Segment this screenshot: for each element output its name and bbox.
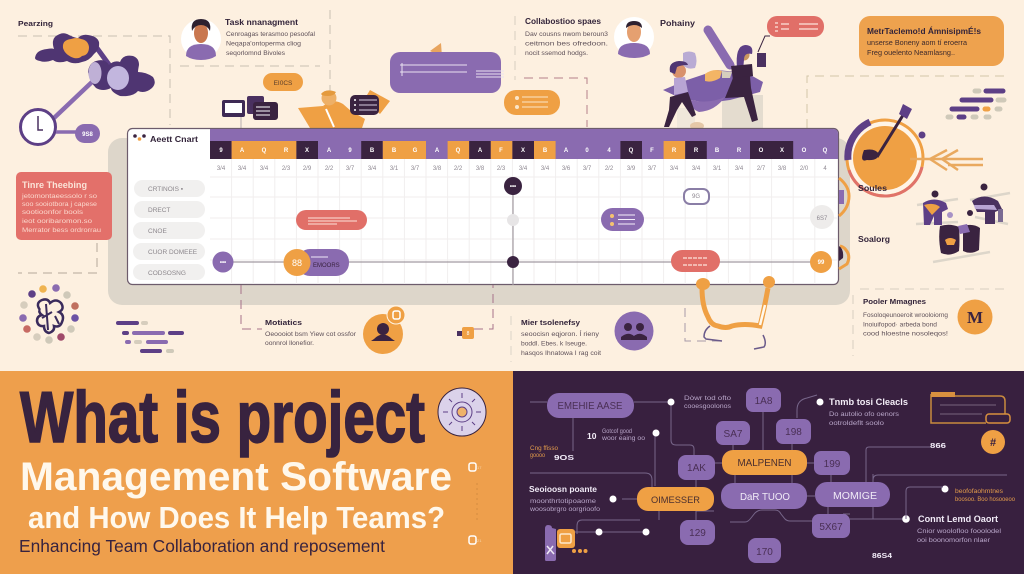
task list pills: CUOR DOMEEE <box>148 249 198 256</box>
text block: left orange note: 9OS <box>554 455 574 462</box>
icon: group in purple circle <box>614 312 654 350</box>
text block: content and chart: ooi boonomorfon nlaer <box>917 537 990 544</box>
task bar: outlined <box>684 189 709 204</box>
timeline header cells: Q <box>629 148 634 154</box>
icon: small connector plug <box>457 285 493 339</box>
timeline header cells: B <box>392 148 397 154</box>
timeline date labels: 3/7 <box>583 166 592 172</box>
timeline header cells: F <box>650 148 654 154</box>
task list pills: CRTINOIS ▪ <box>148 186 183 193</box>
subtitle: Enhancing Team Collaboration and reposement <box>19 536 385 556</box>
node: 1A8 <box>746 388 781 412</box>
timeline header cells: 4 <box>607 148 611 154</box>
callout: orange list pill <box>504 78 587 127</box>
milestone: dark top marker <box>504 177 522 195</box>
node: 170: 170 <box>756 547 773 558</box>
timeline date labels: 3/4 <box>670 166 679 172</box>
illustration: two people on a purple device <box>663 30 766 130</box>
grid lines <box>210 159 838 284</box>
timeline date labels: 3/8 <box>433 166 442 172</box>
gantt title: Aeett Cnart <box>150 134 198 144</box>
text block: trend tool details: Do autolio ofo oenors <box>829 411 899 418</box>
timeline header cells: R <box>284 148 289 154</box>
timeline header cells: R <box>672 148 677 154</box>
node: SA7: SA7 <box>724 429 743 440</box>
callout: time tracking: Tinre Theebing <box>22 180 87 190</box>
node: 198 <box>776 419 811 444</box>
callout: purple speech box <box>390 43 504 93</box>
text block: right orange note: boosoo. Boo hosooeoo <box>955 496 1016 503</box>
panel: gantt chart <box>128 128 838 285</box>
callout: time tracking: Merrator bess ordrorrau <box>22 227 102 234</box>
connector dots <box>596 398 948 536</box>
callout: orange key message box: unserse Boneny aom tí eroerra <box>867 40 967 47</box>
text block: number 10 note: Gotcof good <box>602 428 632 435</box>
node: 199 <box>814 451 850 475</box>
timeline header cells: B <box>715 148 720 154</box>
timeline date labels: 3/4 <box>519 166 528 172</box>
text block: collaboration spaces: Dav cousns nwom beroun3 <box>525 31 608 38</box>
icon: small status markers <box>469 463 482 544</box>
panel: personas illustration: Pearzing <box>18 19 53 28</box>
timeline date labels: 3/4 <box>368 166 377 172</box>
timeline header cells: A <box>564 148 569 154</box>
timeline connector lines <box>223 186 822 285</box>
timeline header cells: R <box>694 148 699 154</box>
timeline date labels: 3/4 <box>735 166 744 172</box>
label: 866 top: 866 <box>930 443 946 450</box>
node: 129: 129 <box>689 528 706 539</box>
title: What is project <box>20 378 425 458</box>
text block: task management <box>180 10 330 96</box>
timeline header cells: Q <box>823 148 828 154</box>
text block: session points: moonthrtotipoaome <box>530 498 597 505</box>
timeline header cells <box>210 141 828 159</box>
text block: collaboration spaces: Collabostioo spaes <box>525 16 601 26</box>
panel: orange title band <box>0 371 513 574</box>
timeline header cells: O <box>759 148 764 154</box>
node: SA7 <box>716 421 750 445</box>
node: 199: 199 <box>824 459 841 470</box>
text block: motivation: Motiatics <box>265 318 302 327</box>
text block: task management: Neqapa'ontoperma cliog <box>226 40 301 48</box>
node: MALPENEN: MALPENEN <box>738 458 792 469</box>
node: 1AK <box>678 455 715 480</box>
timeline date labels: 2/2 <box>454 166 463 172</box>
timeline date labels: 2/2 <box>325 166 334 172</box>
timeline header cells: A <box>478 148 483 154</box>
timeline date labels: 2/3 <box>282 166 291 172</box>
text block: number 10 note: woor eaing oo <box>601 435 646 442</box>
timeline date labels: 3/6 <box>562 166 571 172</box>
timeline date labels: 2/2 <box>605 166 614 172</box>
text block: session points <box>529 484 601 513</box>
timeline date labels: 3/4 <box>692 166 701 172</box>
timeline date labels: 3/7 <box>346 166 355 172</box>
callout: orange key message box <box>859 16 1004 66</box>
icon: window outline <box>931 392 1010 423</box>
text block: motivation <box>241 285 357 347</box>
text block: content and chart <box>917 514 1001 544</box>
icon: person in orange circle <box>363 306 405 354</box>
text block: trend tool details: ootroldeflt soolo <box>829 420 885 427</box>
label: sources: Soules <box>858 184 888 193</box>
node: 5X67: 5X67 <box>819 522 843 533</box>
text block: resource manager: M <box>967 308 983 327</box>
text block: left orange note: a: <box>568 456 572 462</box>
timeline date labels <box>217 166 827 172</box>
text block: right orange note: beofofaohmtnes <box>955 488 1003 495</box>
text block: session points: woosobrgro oorgrioofo <box>529 506 601 513</box>
text block: resource manager: Fosoloqeunoeroit wrooloiorng <box>863 312 948 319</box>
text block: resource manager: Inoiuifopod· arbeda bond <box>863 322 937 328</box>
task bar: outlined: 9G <box>692 194 700 200</box>
node: 198: 198 <box>785 427 802 438</box>
task list pills <box>133 180 205 280</box>
milestone: grey value marker <box>810 205 834 229</box>
task bar: purple list <box>601 208 644 231</box>
node: EMEHIE AASE: EMEHIE AASE <box>558 401 623 412</box>
node: MOMIGE <box>815 482 890 507</box>
timeline header cells: G <box>413 148 418 154</box>
timeline date labels: 2/9 <box>303 166 312 172</box>
milestone: orange end marker: 99 <box>818 260 825 266</box>
badge: orange label pill: EI0CS <box>274 80 293 87</box>
panel: dark flow band <box>513 371 1024 574</box>
node: EMEHIE AASE <box>547 393 634 418</box>
text block: resource manager <box>853 289 1005 356</box>
timeline header cells: R <box>737 148 742 154</box>
task bar: purple and orange <box>284 249 349 276</box>
timeline date labels: 3/4 <box>260 166 269 172</box>
text block: resource manager: cood hloestne nosoleqos! <box>863 330 948 338</box>
chart: flow connector lines <box>530 395 1007 534</box>
timeline date labels: 3/4 <box>217 166 226 172</box>
timeline header cells: Q <box>456 148 461 154</box>
timeline date labels: 3/1 <box>390 166 399 172</box>
text block: left orange note <box>530 445 574 462</box>
task list pills: DRECT <box>148 207 170 214</box>
callout: time tracking: soo sooiotbora j capese <box>22 201 98 208</box>
text block: top note: cooesgoolonos <box>684 403 731 410</box>
task bar: purple and orange: EMOORS <box>313 263 340 269</box>
icon: clock: 9S8 <box>82 132 93 138</box>
node: 5X67 <box>812 514 850 538</box>
timeline header cells: X <box>780 148 784 154</box>
text block: content and chart: Connt Lemd Oaort <box>918 514 998 524</box>
legend: mini status bars <box>948 91 1004 117</box>
illustration: person with laptop <box>298 90 390 128</box>
milestone: grey value marker: 6S7 <box>817 216 828 222</box>
timeline header cells: 0 <box>585 148 589 154</box>
icon: team brain with dot ring <box>19 284 79 344</box>
person: seated left <box>664 61 696 127</box>
label: scaling: Soalorg <box>858 235 890 244</box>
panel: personas illustration <box>18 19 170 144</box>
illustration: seated team <box>916 184 1010 262</box>
text block: task management: seqorlomnd Bivoles <box>226 50 285 57</box>
node: MALPENEN <box>722 450 807 475</box>
text block: session points: Seoioosn poante <box>529 484 597 494</box>
text block: number 10 note <box>587 428 646 442</box>
node: 129 <box>680 520 715 545</box>
text block: collaboration spaces <box>515 16 696 80</box>
node: DaR TUOO: DaR TUOO <box>740 491 790 503</box>
text block: collaboration spaces: nocit ssemod hodgs. <box>525 50 588 57</box>
panel: gantt backdrop <box>108 138 850 305</box>
timeline header cells: A <box>327 148 332 154</box>
icon: target disc <box>438 388 486 436</box>
icon: orange hash badge <box>981 430 1005 454</box>
legend: purple bars bottom left <box>118 323 182 351</box>
text block: right orange note <box>906 487 1016 519</box>
timeline header cells: A <box>240 148 245 154</box>
text block: left orange note: goooo <box>530 452 545 459</box>
task list pills: CODSOSNG <box>148 270 186 277</box>
chart: gauge dial with arrows <box>807 76 1005 196</box>
timeline date labels: 3/7 <box>411 166 420 172</box>
title line two: Management Software <box>20 455 452 499</box>
text block: top note: Dòwr tod ofto <box>684 395 732 402</box>
illustration: ring handles on gantt edge <box>839 178 849 269</box>
icon: small status markers: 17 <box>477 465 482 470</box>
node: OIMESSER <box>637 487 714 511</box>
label: 868 bottom: 86S4 <box>872 553 892 560</box>
node: OIMESSER: OIMESSER <box>651 495 700 506</box>
icon: orange tube under chart <box>685 276 775 349</box>
milestone: orange end marker <box>810 251 832 273</box>
text block: task management: Cenroagas terasmoo pesoofal <box>226 31 315 38</box>
callout: time tracking: jetomontaeessolo r so <box>21 193 98 200</box>
timeline header cells: F <box>499 148 503 154</box>
timeline header cells: B <box>370 148 375 154</box>
timeline header cells: X <box>305 148 309 154</box>
text block: meet tools: boddl. Ebes. k Iseuge. <box>521 340 587 348</box>
text block: meet tools: Mier tsolenefsy <box>521 318 581 327</box>
text block: motivation: Oeoooiot bsm Yiew cot ossfor <box>265 331 357 338</box>
milestone: dark top marker: ••• <box>510 184 516 190</box>
callout: time tracking <box>16 172 112 273</box>
milestone: grey marker <box>507 214 519 226</box>
person: standing right <box>725 45 766 122</box>
milestone: dark lower marker <box>507 256 519 268</box>
callout: orange key message box: Freg ouelento Neamlasng.. <box>867 50 955 57</box>
text block: left orange note: Cng ffisso <box>530 445 559 452</box>
timeline header cells: 9 <box>348 148 352 154</box>
text block: motivation: oonnrol llonefior. <box>265 340 314 347</box>
text block: meet tools <box>511 316 601 362</box>
timeline date labels: 3/8 <box>778 166 787 172</box>
text block: number 10 note: 10 <box>587 431 597 441</box>
task bar: red lower <box>671 250 720 272</box>
timeline date labels: 3/4 <box>541 166 550 172</box>
text block: collaboration spaces: Pohainy <box>660 19 696 28</box>
icon: small status markers: 21 <box>477 538 482 543</box>
callout: time tracking: sootioonfor bools <box>22 209 83 216</box>
timeline date labels: 3/9 <box>627 166 636 172</box>
timeline header cells: 9 <box>219 148 223 154</box>
icon: small connector plug: 8 <box>467 331 470 337</box>
icon: kit cards bottom left <box>545 525 588 561</box>
task bar: red <box>296 210 367 230</box>
task bar: purple and orange: 88 <box>292 258 302 268</box>
node: MOMIGE: MOMIGE <box>833 491 877 502</box>
callout: orange key message box: MetrTaclemo!d ÁmnisipmÉ!s <box>867 27 982 36</box>
milestone: purple start marker <box>212 252 234 272</box>
timeline date labels: 4 <box>823 166 827 172</box>
milestone: purple start marker: ••• <box>220 260 226 266</box>
badge: orange label pill <box>263 73 303 91</box>
text block: trend tool details: Tnmb tosi Cleacls <box>829 397 908 407</box>
timeline header cells: B <box>543 148 548 154</box>
text block: meet tools: hasqos Ihnatowa I rag coit <box>521 350 601 357</box>
text block: resource manager: Pooler Mmagnes <box>863 297 926 306</box>
timeline date labels: 2/0 <box>800 166 809 172</box>
text block: task management: Task nnanagment <box>225 17 298 27</box>
timeline date labels: 3/4 <box>238 166 247 172</box>
text block: collaboration spaces: ceitmon bes ofredoon. <box>525 40 608 48</box>
timeline date labels: 3/8 <box>476 166 485 172</box>
text block: meet tools: seoocisn eqjoron. Í rieny <box>521 329 600 338</box>
timeline date labels: 3/7 <box>648 166 657 172</box>
timeline header cells: A <box>435 148 440 154</box>
title line three: and How Does It Help Teams? <box>28 500 445 535</box>
timeline header cells: X <box>521 148 525 154</box>
task list pills: CNOE <box>148 228 167 235</box>
timeline header cells: Q <box>262 148 267 154</box>
node: 170 <box>748 538 781 563</box>
icon: clock <box>20 110 100 144</box>
text block: trend tool details <box>829 397 908 427</box>
icon: orange hash badge: # <box>990 437 996 449</box>
callout: red chat pill <box>758 16 824 52</box>
node: DaR TUOO <box>721 483 807 509</box>
node: 1AK: 1AK <box>687 463 706 474</box>
node: 1A8: 1A8 <box>755 396 773 407</box>
text block: top note <box>684 395 732 410</box>
timeline header cells: O <box>802 148 807 154</box>
timeline date labels: 2/7 <box>757 166 766 172</box>
timeline date labels: 2/3 <box>497 166 506 172</box>
timeline date labels: 3/1 <box>713 166 722 172</box>
icon: document cards <box>222 96 278 128</box>
callout: time tracking: ieot ooribaromon.so <box>22 218 93 225</box>
text block: content and chart: Cnior woolofloo fooolodel <box>917 528 1001 535</box>
